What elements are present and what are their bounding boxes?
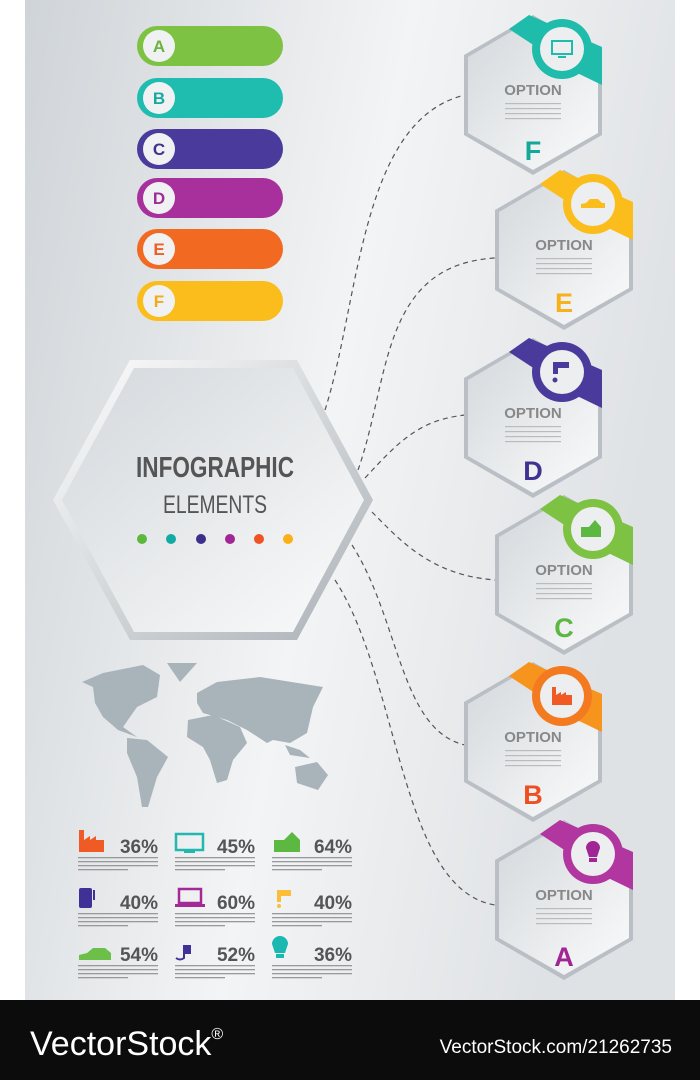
footer bar [0,1000,700,1080]
option A: A [554,942,574,972]
option A [495,820,633,980]
subtitle: ELEMENTS [163,491,267,519]
option A: OPTION [535,887,593,904]
stat: fuel 40%: 40% [120,893,158,914]
option C: C [554,613,574,643]
stat: plug 52% [175,945,255,978]
pill B: B [153,89,165,108]
stats grid [78,830,352,978]
pill D: D [153,189,165,208]
stat: monitor 45% [175,834,255,870]
stat: factory 36% [78,830,158,870]
option F [464,15,602,175]
option hexagons [464,15,633,980]
option B: OPTION [504,729,562,746]
footer bar: ® [211,1026,223,1043]
pill F [137,281,283,321]
world map [82,663,328,807]
central hexagon [53,360,373,640]
pill A: A [153,37,165,56]
stat: factory 36%: 36% [120,837,158,858]
pill B [137,78,283,118]
option F: F [525,136,541,166]
option E: OPTION [535,237,593,254]
option E: E [555,288,573,318]
pill C: C [153,140,165,159]
dashed connectors [325,95,495,905]
pill D [137,178,283,218]
stat: car 54% [78,945,158,978]
option D [464,338,602,498]
footer bar: VectorStock [30,1025,211,1063]
option D: D [523,456,543,486]
stat: tap 40% [272,890,352,926]
stat: car 54%: 54% [120,945,158,966]
stat: fuel 40% [78,888,158,926]
option C [495,495,633,655]
pill F: F [154,292,164,311]
pill list A-F [137,26,283,321]
stat: laptop 60%: 60% [217,893,255,914]
stat: monitor 45%: 45% [217,837,255,858]
pill C [137,129,283,169]
footer bar: VectorStock.com/21262735 [440,1037,672,1058]
stat: bulb 36%: 36% [314,945,352,966]
pill E: E [153,240,165,259]
option F: OPTION [504,82,562,99]
pill E [137,229,283,269]
stat: bulb 36% [272,936,352,978]
stat: plug 52%: 52% [217,945,255,966]
option C: OPTION [535,562,593,579]
title: INFOGRAPHIC [136,452,294,484]
option B [464,662,602,822]
colour dots [137,534,293,544]
stat: house 64% [272,832,352,870]
option E [495,170,633,330]
option B: B [523,780,543,810]
pill A [137,26,283,66]
option D: OPTION [504,405,562,422]
stat: tap 40%: 40% [314,893,352,914]
stat: laptop 60% [175,889,255,926]
stat: house 64%: 64% [314,837,352,858]
